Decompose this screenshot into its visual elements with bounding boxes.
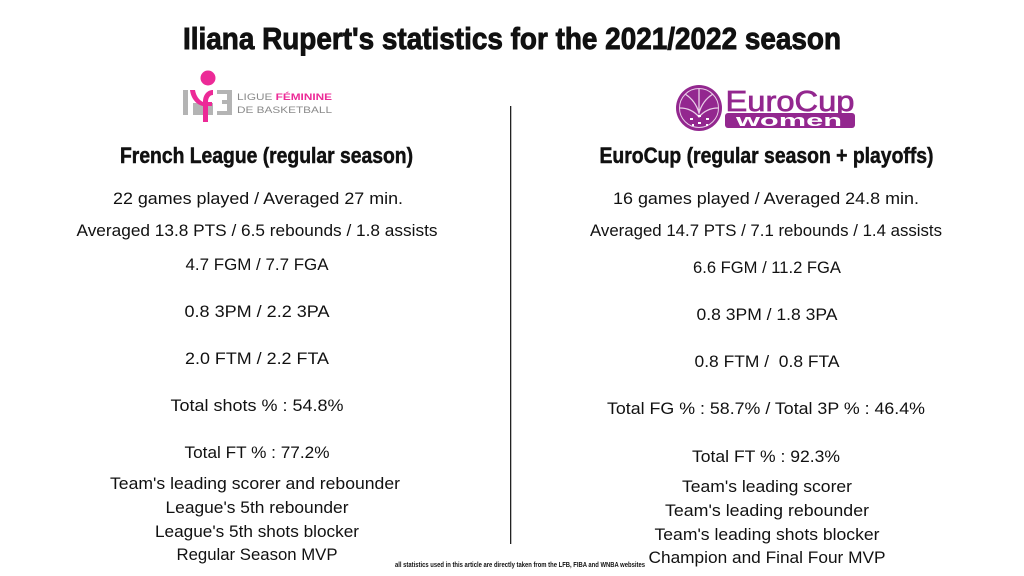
text: team leading scorer: Team's leading scorer and rebounder	[110, 474, 400, 493]
icon: LFB logo: LIGUE FÉMININE	[237, 92, 332, 103]
text: games and minutes: 22 games played / Averaged 27 min.	[113, 189, 403, 208]
text: field goals: 4.7 FGM / 7.7 FGA	[186, 255, 329, 274]
icon: EuroCup Women logo	[676, 85, 855, 131]
text: three pointers: 0.8 3PM / 1.8 3PA	[696, 305, 838, 324]
title: Iliana Rupert's statistics for the 2021/2022 season	[183, 21, 841, 56]
text: points rebounds assists: Averaged 14.7 PTS / 7.1 rebounds / 1.4 assists	[590, 221, 942, 240]
text: free throw percent: Total FT % : 92.3%	[692, 447, 840, 466]
icon: EuroCup Women logo: women	[734, 111, 842, 130]
heading: EuroCup: EuroCup (regular season + playoffs)	[600, 143, 934, 168]
text: free throw percent: Total FT % : 77.2%	[184, 443, 330, 462]
text: team leading scorer: Team's leading scorer	[682, 477, 852, 496]
panel: French League	[76, 143, 438, 564]
text: FG and 3P percent: Total FG % : 58.7% / Total 3P % : 46.4%	[607, 399, 925, 418]
text: league rebounder rank: League's 5th rebounder	[166, 498, 349, 517]
icon: EuroCup Women logo: EuroCup	[726, 86, 854, 118]
text: field goals: 6.6 FGM / 11.2 FGA	[693, 258, 842, 277]
text: champion and MVP: Champion and Final Four MVP	[648, 548, 886, 567]
text: total shots percent: Total shots % : 54.8%	[170, 396, 344, 415]
text: team leading shot blocker: Team's leading shots blocker	[654, 525, 880, 544]
text: MVP: Regular Season MVP	[176, 545, 338, 564]
icon: LFB logo	[183, 70, 332, 122]
text: league shot blocker rank: League's 5th shots blocker	[155, 522, 359, 541]
panel: EuroCup	[590, 143, 942, 567]
text: free throws: 0.8 FTM / 0.8 FTA	[694, 352, 840, 371]
divider line	[510, 106, 511, 544]
text: team leading rebounder: Team's leading rebounder	[665, 501, 869, 520]
text: points rebounds assists: Averaged 13.8 PTS / 6.5 rebounds / 1.8 assists	[76, 221, 438, 240]
text: three pointers: 0.8 3PM / 2.2 3PA	[184, 302, 330, 321]
text: games and minutes: 16 games played / Averaged 24.8 min.	[613, 189, 919, 208]
heading: French League: French League (regular season)	[120, 143, 413, 168]
footnote: all statistics used in this article are directly taken from the LFB, FIBA and WNBA websites	[395, 560, 645, 569]
text: free throws: 2.0 FTM / 2.2 FTA	[185, 349, 330, 368]
icon: LFB logo: DE BASKETBALL	[237, 105, 332, 116]
